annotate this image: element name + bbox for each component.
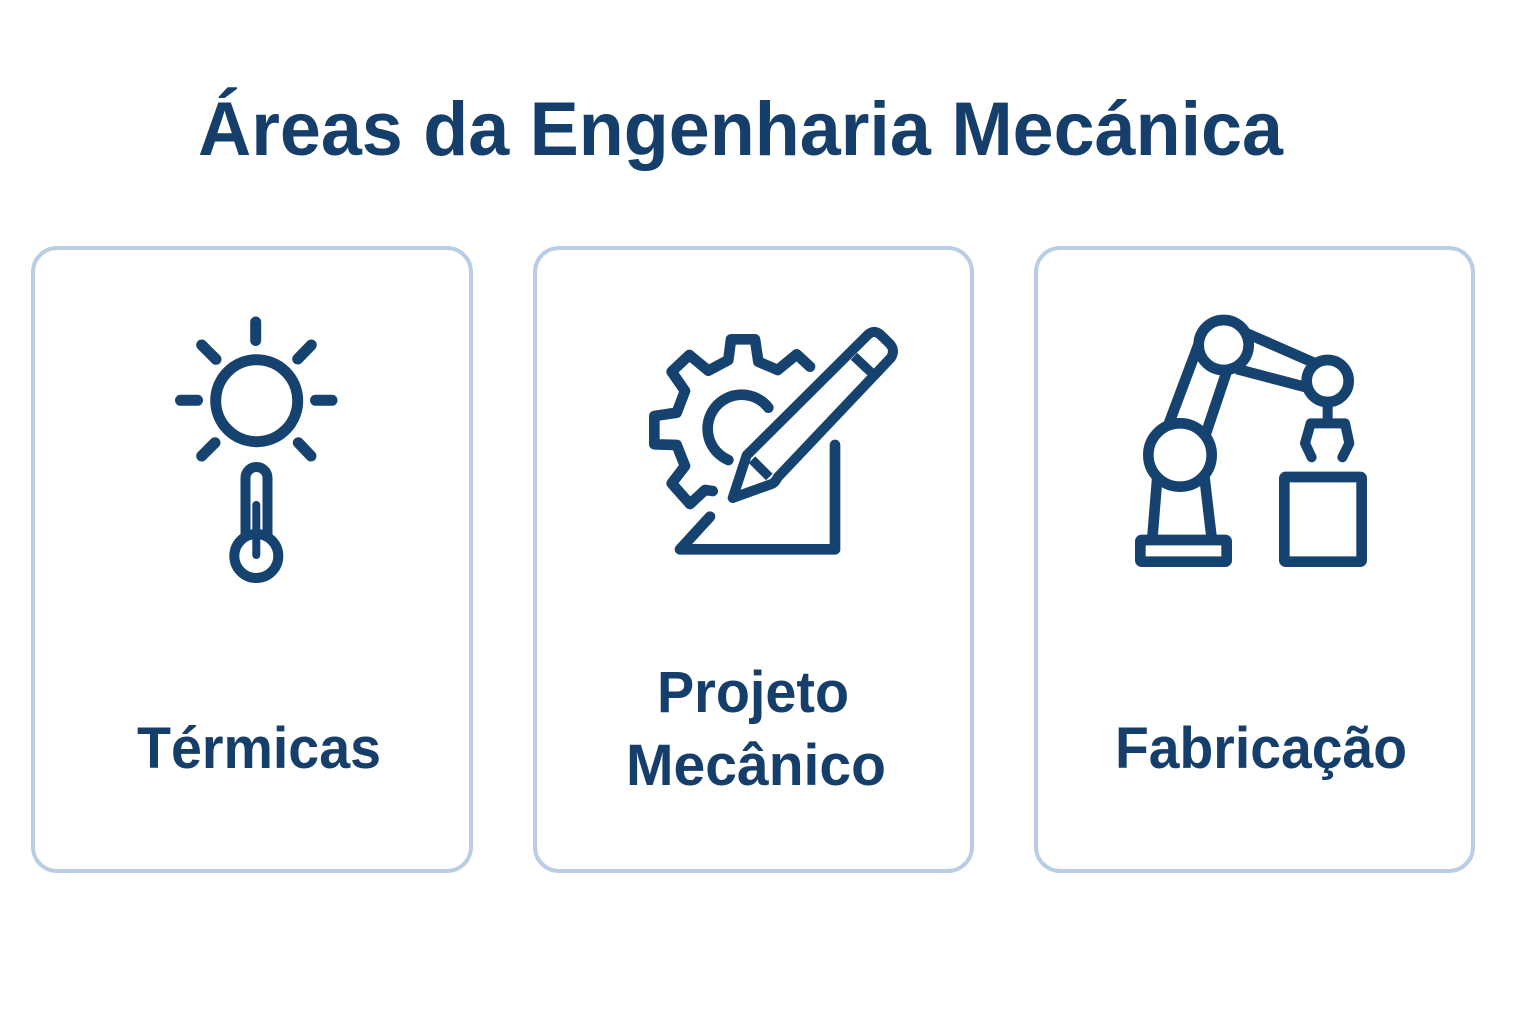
pencil [733, 332, 893, 498]
panel: Projeto Mecânico [535, 248, 972, 871]
robot arm links [1152, 333, 1317, 538]
label: Térmicas: Térmicas [137, 716, 381, 781]
label: Projeto Mecânico: Projeto [657, 660, 849, 725]
icon: robot arm and box [1140, 320, 1362, 562]
title: Áreas da Engenharia Mecánica [198, 87, 1284, 172]
panel: Fabricação [1036, 248, 1473, 871]
label: Fabricação: Fabricação [1115, 716, 1407, 781]
label: Projeto Mecânico [626, 660, 886, 798]
panel: Térmicas [33, 248, 471, 871]
robot joints [1148, 320, 1349, 487]
robot base [1140, 540, 1227, 562]
gear hub arc [708, 395, 768, 460]
gear [654, 339, 810, 504]
thermometer [234, 467, 278, 578]
set square [680, 445, 835, 549]
icon: gear, pencil and square [654, 332, 893, 549]
icon: sun and thermometer [180, 322, 332, 578]
sun [180, 322, 332, 456]
box [1284, 477, 1362, 562]
gripper [1305, 405, 1349, 457]
pencil bands [752, 356, 871, 477]
label: Projeto Mecânico: Mecânico [626, 733, 886, 798]
